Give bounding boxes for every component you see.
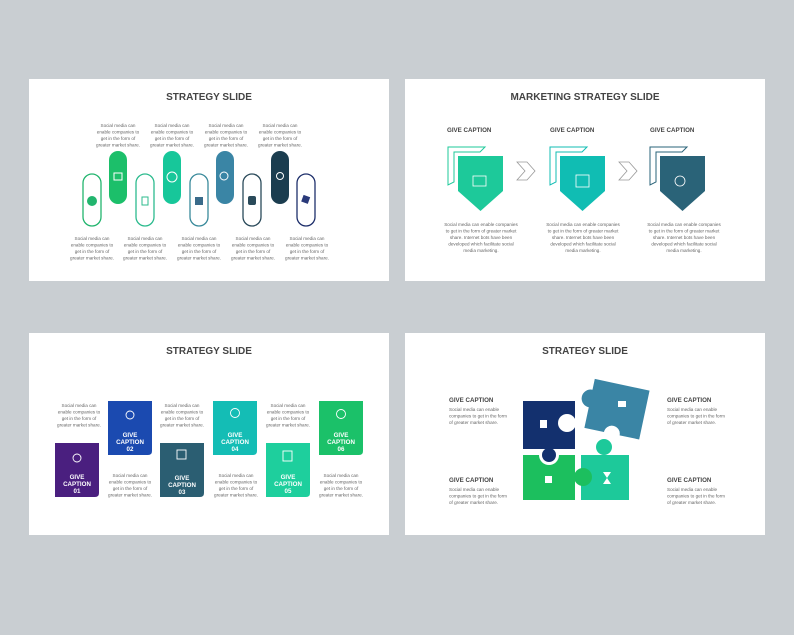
descriptions: Social media can enable companies <box>444 222 518 227</box>
filled pills <box>109 151 289 204</box>
icons <box>87 172 310 206</box>
descriptions: media marketing. <box>463 248 499 253</box>
bottom texts: enable companies to <box>178 242 221 248</box>
card texts: Social media can <box>271 403 306 408</box>
card labels: 04 <box>232 446 239 453</box>
card labels <box>63 432 355 496</box>
captions: GIVE CAPTION <box>449 477 494 484</box>
bottom texts <box>70 236 329 260</box>
top texts: Social media can <box>155 123 190 128</box>
caption texts: Social media can enable <box>449 407 499 412</box>
bottom texts: greater market share. <box>70 256 114 260</box>
caption texts: companies to get in the form <box>667 494 725 498</box>
puzzle <box>523 377 650 500</box>
descriptions: to get in the form of greater market <box>649 228 720 234</box>
bottom texts: enable companies to <box>286 242 329 248</box>
card texts: greater market share. <box>57 422 101 428</box>
card labels: 02 <box>127 446 134 453</box>
descriptions: Social media can enable companies <box>546 222 620 227</box>
top texts: Social media can <box>209 123 244 128</box>
card labels: GIVE <box>70 474 84 481</box>
top texts <box>96 123 302 148</box>
card texts: greater market share. <box>214 492 258 498</box>
card texts: greater market share. <box>108 492 152 498</box>
card texts: get in the form of <box>62 416 97 421</box>
card texts: greater market share. <box>319 492 363 498</box>
card texts: get in the form of <box>324 486 359 491</box>
caption texts: companies to get in the form <box>449 494 507 498</box>
captions <box>449 397 712 484</box>
bottom texts: get in the form of <box>75 249 110 254</box>
bottom texts: Social media can <box>236 236 271 241</box>
caption texts: of greater market share. <box>667 420 716 425</box>
captions: GIVE CAPTION <box>667 477 712 484</box>
top texts: Social media can <box>101 123 136 128</box>
bottom texts: greater market share. <box>231 256 275 260</box>
card texts: enable companies to <box>58 410 101 414</box>
card texts: enable companies to <box>109 480 152 484</box>
captions: GIVE CAPTION <box>650 127 695 134</box>
card labels: GIVE <box>123 432 137 439</box>
card texts: get in the form of <box>113 486 148 491</box>
descriptions: share. Internet bots have been <box>450 235 513 240</box>
panel: puzzle strategy slide <box>405 333 765 535</box>
captions: GIVE CAPTION <box>447 127 492 134</box>
top texts: Social media can <box>263 123 298 128</box>
panel: strategy slide cards <box>29 333 389 535</box>
top texts: get in the form of <box>263 136 298 141</box>
bottom texts: Social media can <box>128 236 163 241</box>
descriptions: share. Internet bots have been <box>653 235 716 240</box>
caption texts: companies to get in the form <box>449 414 507 418</box>
title: MARKETING STRATEGY SLIDE <box>510 92 660 103</box>
bottom texts: greater market share. <box>285 256 329 260</box>
card texts: Social media can <box>165 403 200 408</box>
bottom texts: greater market share. <box>123 256 167 260</box>
captions: GIVE CAPTION <box>449 397 494 404</box>
descriptions: developed which facilitate social <box>550 242 616 246</box>
card texts: enable companies to <box>215 480 258 484</box>
card texts: Social media can <box>113 473 148 478</box>
card labels: 03 <box>179 489 186 496</box>
card labels: 01 <box>74 488 81 495</box>
title: STRATEGY SLIDE <box>542 346 628 357</box>
card texts: Social media can <box>219 473 254 478</box>
descriptions: developed which facilitate social <box>448 242 514 246</box>
card texts: enable companies to <box>161 410 204 414</box>
captions <box>447 127 695 134</box>
bottom texts: get in the form of <box>128 249 163 254</box>
caption texts: Social media can enable <box>449 487 499 492</box>
descriptions: media marketing. <box>666 248 702 253</box>
card labels: CAPTION <box>327 439 355 446</box>
top texts: greater market share. <box>96 142 140 148</box>
captions: GIVE CAPTION <box>550 127 595 134</box>
card labels: CAPTION <box>116 439 144 446</box>
top texts: greater market share. <box>150 142 194 148</box>
card labels: CAPTION <box>221 439 249 446</box>
descriptions: developed which facilitate social <box>651 242 717 246</box>
top texts: enable companies to <box>151 130 194 134</box>
top texts: get in the form of <box>209 136 244 141</box>
descriptions: to get in the form of greater market <box>446 228 517 234</box>
card labels: GIVE <box>281 474 295 481</box>
card texts: get in the form of <box>219 486 254 491</box>
bottom texts: get in the form of <box>182 249 217 254</box>
bottom texts: enable companies to <box>232 242 275 248</box>
caption texts <box>449 407 725 505</box>
bottom texts: enable companies to <box>124 242 167 248</box>
card texts: greater market share. <box>160 422 204 428</box>
card texts: greater market share. <box>266 422 310 428</box>
top texts: greater market share. <box>204 142 248 148</box>
descriptions: Social media can enable companies <box>647 222 721 227</box>
caption texts: Social media can enable <box>667 407 717 412</box>
card texts: Social media can <box>324 473 359 478</box>
card labels: CAPTION <box>168 482 196 489</box>
shield shapes <box>448 147 705 211</box>
bottom texts: enable companies to <box>71 242 114 248</box>
card icons <box>73 408 346 462</box>
title: STRATEGY SLIDE <box>166 346 252 357</box>
descriptions: media marketing. <box>565 248 601 253</box>
descriptions: share. Internet bots have been <box>552 235 615 240</box>
card labels: GIVE <box>175 475 189 482</box>
descriptions: to get in the form of greater market <box>548 228 619 234</box>
card labels: GIVE <box>228 432 242 439</box>
bottom texts: get in the form of <box>290 249 325 254</box>
bottom texts: get in the form of <box>236 249 271 254</box>
descriptions <box>444 222 721 253</box>
card texts: Social media can <box>62 403 97 408</box>
bottom texts: Social media can <box>290 236 325 241</box>
bottom texts: Social media can <box>182 236 217 241</box>
card labels: CAPTION <box>274 481 302 488</box>
card labels: 05 <box>285 488 292 495</box>
card texts: get in the form of <box>165 416 200 421</box>
top texts: enable companies to <box>259 130 302 134</box>
caption texts: of greater market share. <box>449 420 498 425</box>
card texts: get in the form of <box>271 416 306 421</box>
top texts: greater market share. <box>258 142 302 148</box>
outline pills <box>83 174 315 226</box>
card texts: enable companies to <box>320 480 363 484</box>
card texts: enable companies to <box>267 410 310 414</box>
caption texts: Social media can enable <box>667 487 717 492</box>
top texts: enable companies to <box>205 130 248 134</box>
card labels: CAPTION <box>63 481 91 488</box>
panel: strategy slide pills <box>29 79 389 281</box>
title: STRATEGY SLIDE <box>166 92 252 103</box>
top texts: enable companies to <box>97 130 140 134</box>
arrows <box>517 162 637 180</box>
bottom texts: greater market share. <box>177 256 221 260</box>
captions: GIVE CAPTION <box>667 397 712 404</box>
caption texts: of greater market share. <box>449 500 498 505</box>
top texts: get in the form of <box>101 136 136 141</box>
cards <box>55 401 363 497</box>
card labels: 06 <box>338 446 345 453</box>
caption texts: companies to get in the form <box>667 414 725 418</box>
panel: marketing strategy slide <box>405 79 765 281</box>
top texts: get in the form of <box>155 136 190 141</box>
bottom texts: Social media can <box>75 236 110 241</box>
caption texts: of greater market share. <box>667 500 716 505</box>
card texts <box>57 403 363 498</box>
card labels: GIVE <box>334 432 348 439</box>
